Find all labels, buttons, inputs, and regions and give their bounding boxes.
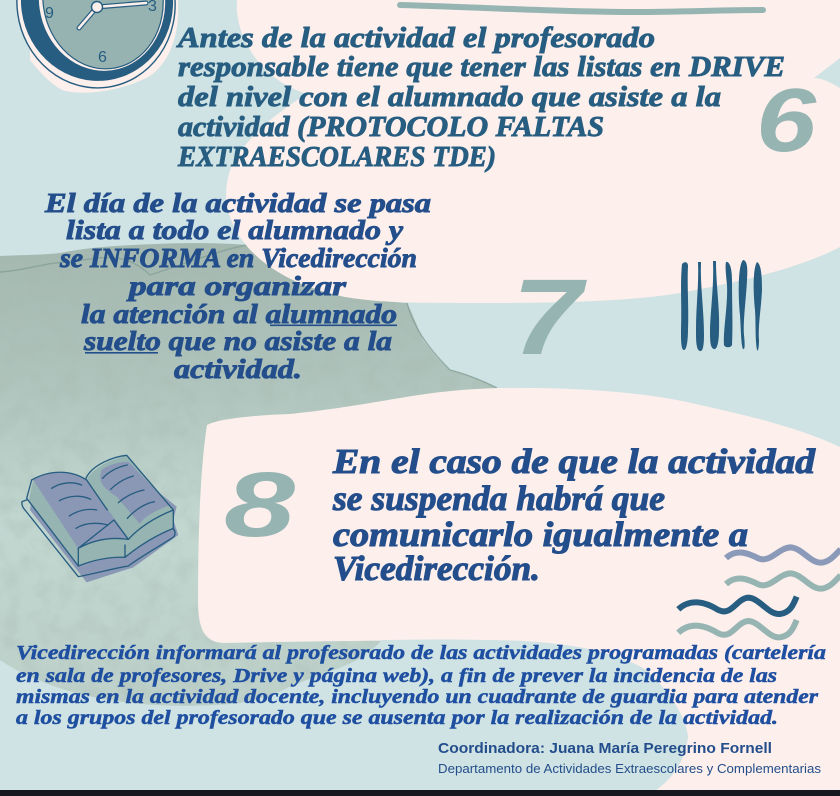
footer paragraph: mismas en la actividad docente, incluyendo un cuadrante de guardia para atender (16, 686, 818, 708)
clock numerals: 6 (98, 49, 107, 66)
text block: step 7: para organizar (126, 271, 347, 301)
text block: step 7: se INFORMA en Vicedirección (59, 243, 417, 273)
pink panel: top blob (226, 0, 840, 303)
icon: waves (678, 547, 840, 637)
top decorative bar (400, 5, 763, 12)
number 6: 6 (756, 71, 817, 171)
footer paragraph: Vicedirección informará al profesorado de las actividades programadas (cartelería (16, 642, 826, 664)
clock numerals: 9 (45, 5, 54, 22)
text block: step 8: Vicedirección. (333, 549, 540, 588)
footer paragraph: a los grupos del profesorado que se ausenta por la realización de la actividad. (16, 707, 778, 729)
text block: step 8 (332, 442, 816, 588)
credits: Departamento de Actividades Extraescolares y Complementarias (438, 762, 821, 776)
text block: step 6: del nivel con el alumnado que asiste a la (178, 81, 721, 113)
watercolour stain (0, 243, 497, 708)
pale blue blob behind footer (0, 639, 688, 790)
text block: step 7: suelto que no asiste a la (83, 326, 392, 356)
icon: open book (22, 455, 178, 582)
text block: step 6: actividad (PROTOCOLO FALTAS (178, 111, 604, 143)
text block: step 6: responsable tiene que tener las listas en DRIVE (178, 51, 785, 83)
text block: step 6: Antes de la actividad el profesorado (176, 22, 655, 54)
text block: step 8: En el caso de que la actividad (332, 442, 816, 481)
footer paragraph (16, 642, 826, 729)
text block: step 7: la atención al alumnado (81, 299, 397, 329)
book page edges (78, 510, 173, 566)
book outline (22, 455, 175, 577)
icon: vertical bars (681, 260, 762, 351)
text block: step 7: lista a todo el alumnado y (66, 215, 404, 245)
credits: Coordinadora: Juana María Peregrino Fornell (438, 740, 772, 757)
footer paragraph: en sala de profesores, Drive y página web), a fin de prever la incidencia de las (16, 665, 777, 687)
text block: step 7: actividad. (174, 354, 302, 384)
book shadow (30, 458, 178, 582)
text block: step 8: se suspenda habrá que (332, 479, 665, 518)
number 7: 7 (512, 256, 588, 377)
text block: step 7 (44, 188, 431, 384)
clock numerals (45, 0, 157, 66)
number 8: 8 (224, 454, 296, 556)
bottom dark bar (0, 790, 840, 796)
clock hands (79, 3, 146, 28)
text block: step 6: EXTRAESCOLARES TDE) (177, 141, 496, 173)
credits (438, 740, 821, 776)
text block: step 7: El día de la actividad se pasa (44, 188, 431, 218)
text block: step 8: comunicarlo igualmente a (333, 515, 748, 554)
pink panel: lower blob (198, 388, 840, 790)
icon: clock (6, 0, 186, 98)
text block: step 6 (176, 22, 785, 173)
